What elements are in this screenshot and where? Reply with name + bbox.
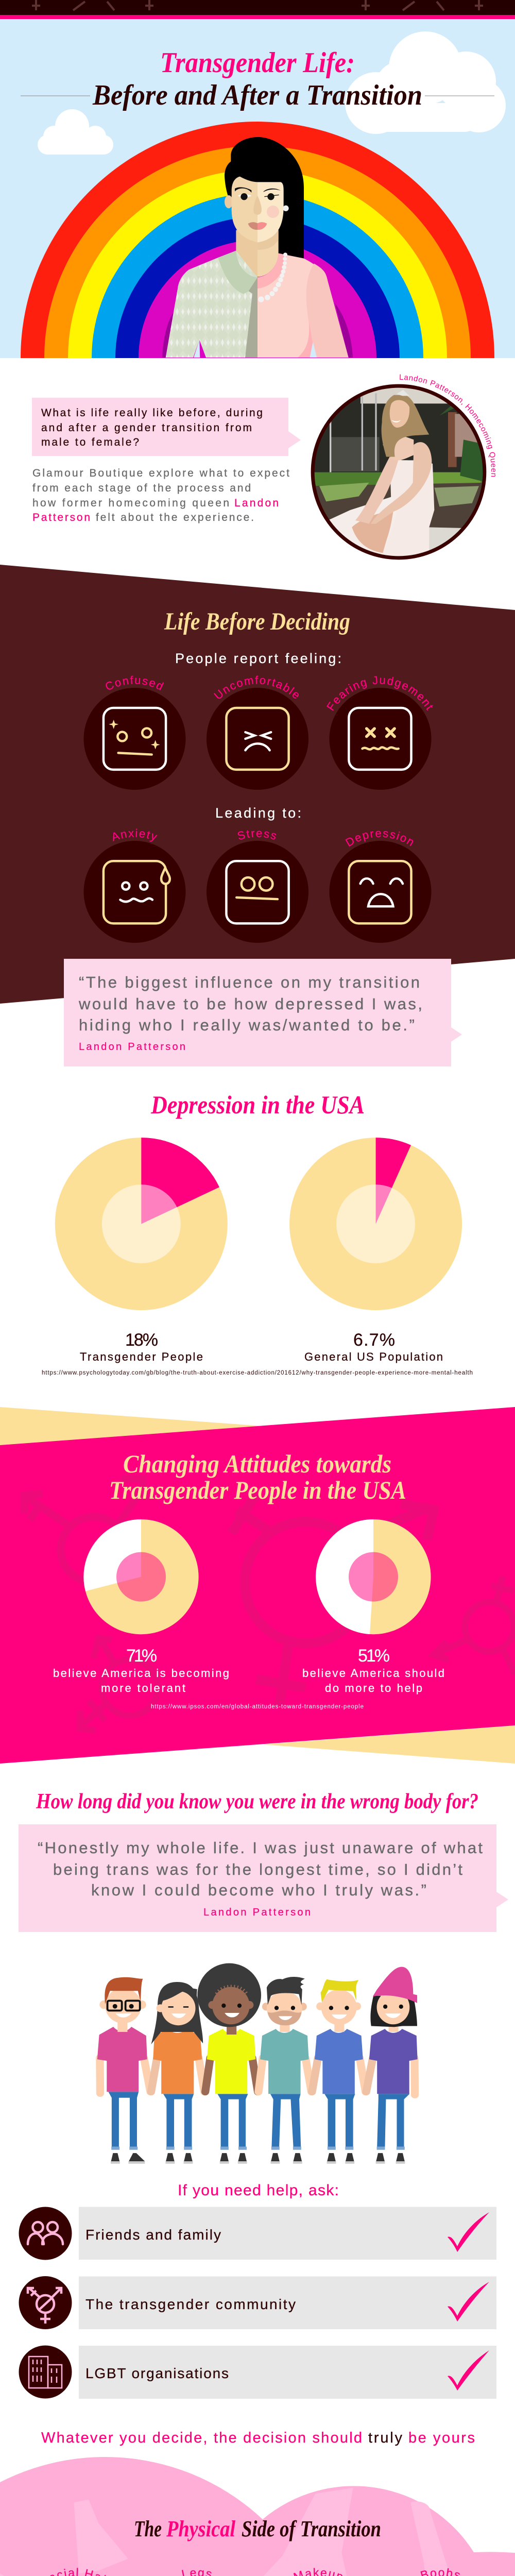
title: Before and After a Transition xyxy=(92,79,422,111)
watermark gender symbols xyxy=(25,1479,515,1731)
help row: LGBT organisations xyxy=(19,2345,496,2399)
donut chart: 51% xyxy=(316,1519,431,1634)
feeling: stress: Stress xyxy=(238,831,276,840)
donut labels xyxy=(53,1646,444,1694)
quote: biggest influence: “The biggest influence on my transition xyxy=(79,973,420,991)
intro text: Patterson xyxy=(32,512,90,523)
quote: biggest influence: would have to be how depressed I was, xyxy=(78,995,422,1013)
donut labels: believe America is becoming xyxy=(53,1667,229,1680)
title xyxy=(21,47,494,111)
pie chart: general population 6.7% xyxy=(289,1138,462,1310)
photo: Landon Patterson xyxy=(309,386,489,560)
statement: the decision: be yours xyxy=(408,2430,475,2446)
heads xyxy=(99,1963,417,2044)
heading: Changing Attitudes towards xyxy=(123,1449,391,1478)
feeling: confused xyxy=(83,676,185,790)
intro callout: What is life really like before, during xyxy=(41,407,263,419)
face icons xyxy=(104,708,411,923)
feeling: depression xyxy=(330,831,432,943)
heading: Side of Transition xyxy=(242,2516,381,2541)
intro text: how former homecoming queen xyxy=(32,497,229,509)
feeling: fearing judgement: Fearing Judgement xyxy=(327,676,433,711)
panel: changing attitudes xyxy=(0,1407,515,1764)
intro text: Landon xyxy=(234,497,279,509)
heading: Life Before Deciding xyxy=(164,608,350,635)
hero panel: sky with rainbow xyxy=(0,19,515,358)
heading: The xyxy=(134,2516,162,2541)
pie chart: transgender people 18% xyxy=(55,1138,228,1310)
person 2 xyxy=(151,1982,203,2044)
donut labels: 51% xyxy=(358,1646,390,1666)
pie labels xyxy=(80,1330,443,1363)
help row: transgender community xyxy=(19,2276,496,2329)
cloud: small left xyxy=(38,109,113,155)
source link: https://www.psychologytoday.com/gb/blog/the-truth-about-exercise-addiction/201612/why-transgender-people-experience-more-mental-health xyxy=(42,1370,473,1376)
statement: the decision: truly xyxy=(368,2430,403,2446)
person 4 xyxy=(262,1977,307,2025)
intro callout: male to female? xyxy=(41,436,139,448)
person 3 xyxy=(197,1963,261,2027)
help row: friends and family xyxy=(19,2207,496,2260)
intro callout xyxy=(32,398,301,456)
feeling: stress xyxy=(207,831,308,943)
panel: physical side of transition xyxy=(0,2457,515,2576)
intro text: Glamour Boutique explore what to expect xyxy=(32,467,289,479)
subheading: leading to: Leading to: xyxy=(215,805,301,821)
donut labels: more tolerant xyxy=(101,1682,185,1694)
title: Transgender Life: xyxy=(160,47,355,79)
quote: whole life xyxy=(19,1824,508,1932)
pie labels: Transgender People xyxy=(80,1350,203,1363)
quote: biggest influence: hiding who I really was/wanted to be.” xyxy=(79,1016,415,1034)
pie labels: 6.7% xyxy=(353,1330,395,1350)
intro text xyxy=(32,467,289,523)
statement: the decision: Whatever you decide, the decision should xyxy=(41,2430,362,2446)
donut labels: believe America should xyxy=(302,1667,444,1680)
pie labels: 18% xyxy=(125,1330,158,1350)
quote: biggest influence xyxy=(64,959,462,1066)
rainbow xyxy=(21,122,494,358)
legs and shirts xyxy=(97,2027,418,2164)
labels xyxy=(45,2568,460,2576)
cloud: large right xyxy=(345,31,506,134)
feeling: anxiety xyxy=(83,828,185,943)
donut labels: 71% xyxy=(126,1646,157,1666)
illustration: half male half female figure xyxy=(162,137,353,358)
heading: Physical xyxy=(166,2516,236,2541)
quote: whole life: know I could become who I truly was.” xyxy=(91,1881,426,1899)
feeling: fearing judgement xyxy=(327,676,433,790)
help row: LGBT organisations: LGBT organisations xyxy=(85,2365,229,2381)
feeling: uncomfortable xyxy=(207,675,308,790)
heading xyxy=(109,1449,406,1504)
intro text: felt about the experience. xyxy=(96,512,254,523)
feeling: confused: Confused xyxy=(106,676,164,690)
heading xyxy=(134,2516,381,2541)
watermark shoes and lipsticks xyxy=(0,2488,506,2576)
heading: Transgender People in the USA xyxy=(109,1476,406,1504)
intro callout: and after a gender transition from xyxy=(41,422,252,434)
quote: whole life: Landon Patterson xyxy=(203,1907,311,1918)
intro text: from each stage of the process and xyxy=(32,482,251,494)
help row: transgender community: The transgender community xyxy=(85,2296,296,2312)
help row: friends and family: Friends and family xyxy=(85,2227,221,2243)
person 6 xyxy=(370,1967,417,2027)
quote: whole life: “Honestly my whole life. I was just unaware of what xyxy=(38,1839,483,1857)
quote: whole life: being trans was for the longest time, so I didn’t xyxy=(53,1860,462,1878)
curved caption: Landon Patterson, Homecoming Queen xyxy=(400,374,495,477)
source link: https://www.ipsos.com/en/global-attitudes-toward-transgender-people xyxy=(151,1704,364,1710)
illustration: group of people xyxy=(97,1963,418,2164)
donut labels: do more to help xyxy=(325,1682,422,1694)
header strip xyxy=(0,0,515,19)
donut chart: 71% xyxy=(83,1519,199,1634)
heading: depression: Depression in the USA xyxy=(150,1090,365,1119)
feeling: depression: Depression xyxy=(345,831,413,847)
quote: biggest influence: Landon Patterson xyxy=(79,1041,185,1053)
pie labels: General US Population xyxy=(304,1350,443,1363)
feeling: uncomfortable: Uncomfortable xyxy=(214,675,299,699)
subheading: people report feeling: People report feeling: xyxy=(175,651,341,666)
subheading: if you need help: If you need help, ask: xyxy=(178,2182,339,2199)
person 5 xyxy=(316,1979,361,2025)
feeling: anxiety: Anxiety xyxy=(113,828,158,842)
panel: life before deciding xyxy=(0,565,515,1004)
person 1 xyxy=(99,1977,146,2023)
